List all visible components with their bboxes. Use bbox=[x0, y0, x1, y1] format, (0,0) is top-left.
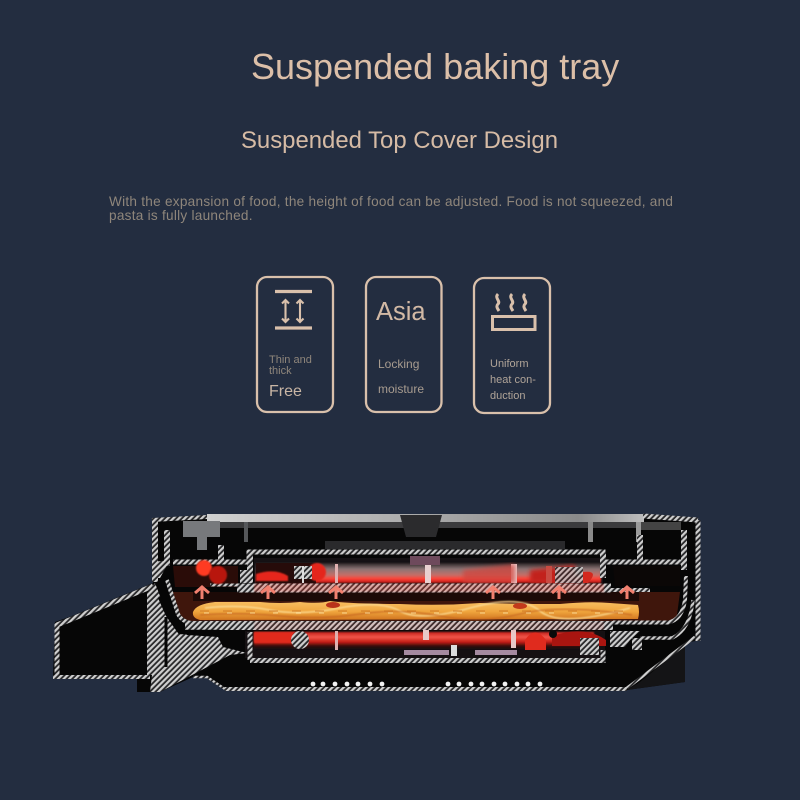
label: uniform heat conduction: duction bbox=[490, 390, 525, 402]
description text bbox=[109, 194, 673, 223]
label: uniform heat conduction: heat con- bbox=[490, 374, 536, 386]
food: flatbread bbox=[193, 601, 639, 620]
icon: heat waves over plate bbox=[492, 294, 535, 330]
title: Suspended baking tray bbox=[251, 46, 619, 87]
label: thin and thick: Thin and bbox=[269, 354, 312, 366]
icon: adjustable height arrows bbox=[275, 292, 312, 328]
hatched wedge and brackets bbox=[147, 560, 642, 692]
label: locking moisture bbox=[378, 357, 424, 396]
black inner lining bbox=[160, 597, 220, 667]
label: locking moisture: Locking bbox=[378, 357, 419, 371]
upper heating chamber bbox=[254, 556, 603, 583]
hatched shell walls bbox=[53, 516, 698, 689]
feature card: uniform heat conduction bbox=[474, 278, 550, 413]
label: uniform heat conduction bbox=[490, 358, 536, 402]
lid top band bbox=[183, 514, 681, 550]
food chamber bbox=[172, 592, 680, 623]
label: Asia: Asia bbox=[376, 298, 426, 326]
label: locking moisture: moisture bbox=[378, 382, 424, 396]
red glow on plates bbox=[254, 584, 604, 630]
label: uniform heat conduction: Uniform bbox=[490, 358, 529, 370]
label: free: Free bbox=[269, 383, 302, 400]
lower heating chamber bbox=[245, 630, 606, 658]
description text: pasta is fully launched. bbox=[109, 208, 253, 223]
device body silhouette bbox=[53, 515, 700, 692]
label: thin and thick: thick bbox=[269, 365, 292, 377]
side chambers bbox=[173, 566, 238, 587]
lower right shell shading bbox=[627, 645, 685, 690]
feature card: locking moisture bbox=[366, 277, 442, 412]
feature card: thin and thick free bbox=[257, 277, 333, 412]
upward heat arrows bbox=[195, 587, 634, 599]
red hot spot bbox=[196, 560, 227, 584]
cross-section of baking tray bbox=[53, 514, 700, 692]
description text: With the expansion of food, the height of food can be adjusted. Food is not squeezed, and bbox=[109, 194, 673, 209]
subtitle: Suspended Top Cover Design bbox=[241, 127, 558, 154]
vent dots bbox=[311, 682, 542, 686]
label: thin and thick bbox=[269, 354, 312, 377]
